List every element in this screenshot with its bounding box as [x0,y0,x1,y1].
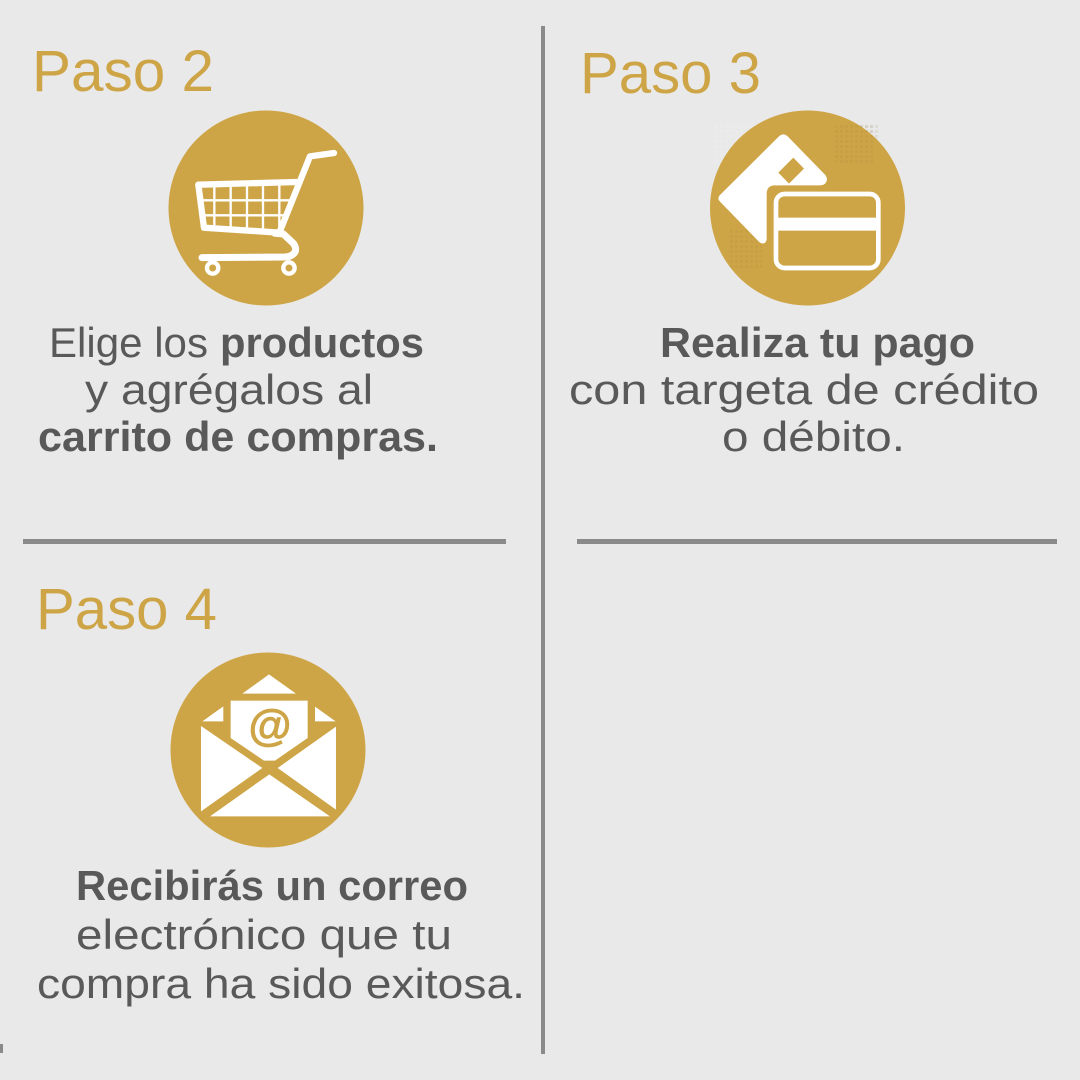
text: step 4 description: compra ha sido exitosa. [37,960,525,1007]
text: step 3 description: con targeta de crédito [569,366,1039,413]
text: step 3 description: Realiza tu pago [660,319,975,366]
text: step 4 description [37,862,525,1007]
panel: Paso 3 [569,41,1039,460]
text: step 2 description [38,319,438,460]
text: step 3 description: o débito. [722,413,905,460]
heading: Paso 2: Paso 2 [32,39,214,104]
panel: Paso 4 [36,577,525,1007]
text: step 4 description: Recibirás un correo [76,862,468,909]
panel: Paso 2 [32,39,438,460]
text: step 2 description: productos [220,319,424,366]
icon: shopping cart [168,110,364,306]
text: step 4 description: electrónico que tu [76,911,452,958]
heading: Paso 4: Paso 4 [36,577,217,642]
text: step 2 description: Elige los [49,319,208,366]
text: step 2 description: y agrégalos al [85,366,373,413]
text: step 3 description [569,319,1039,460]
heading: Paso 3: Paso 3 [580,41,761,106]
icon: credit cards [710,110,905,306]
icon: open envelope with at sign: @ [249,701,291,750]
text: step 2 description: carrito de compras. [38,413,438,460]
icon: open envelope with at sign [170,652,366,848]
